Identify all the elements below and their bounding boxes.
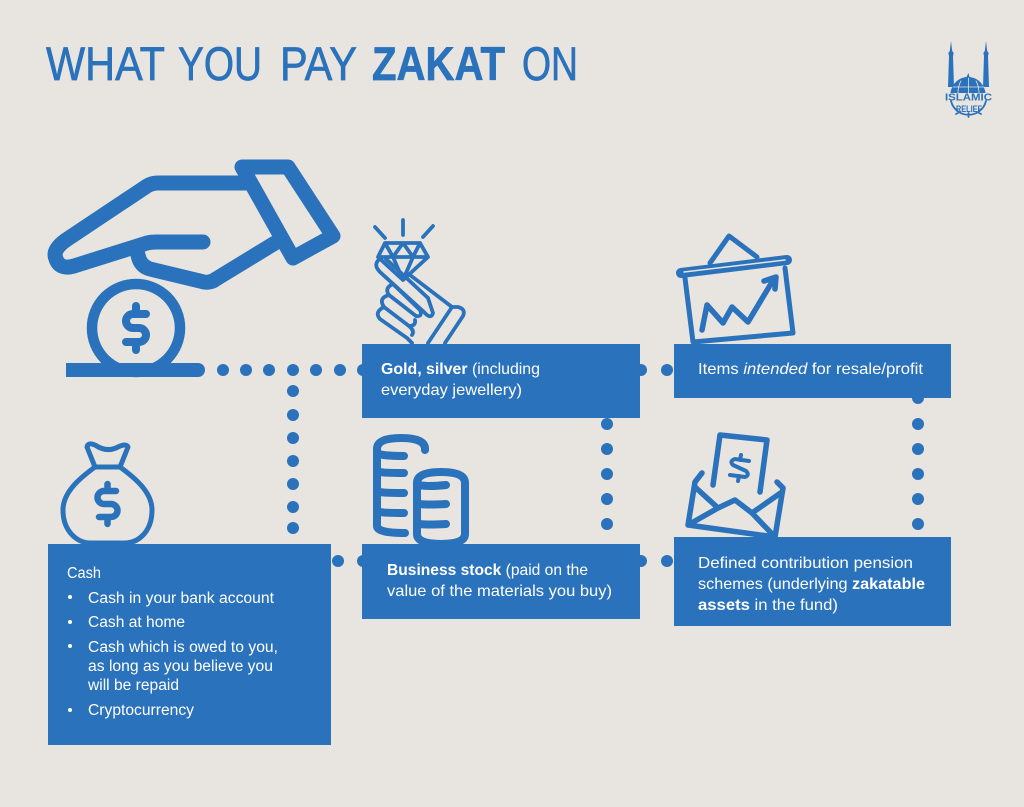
connector dots: items to pension xyxy=(912,392,924,530)
panel: defined contribution pension: assets in the fund) xyxy=(698,597,838,614)
connector dots: gold to business stock xyxy=(601,418,613,530)
board roof xyxy=(710,236,757,263)
panel: cash xyxy=(48,544,331,745)
hand outline xyxy=(55,183,275,282)
board top rail xyxy=(681,260,787,273)
panel: cash: Cash at home xyxy=(88,614,185,631)
panel: gold and silver: Gold, silver (including xyxy=(381,361,540,378)
panel: cash: as long as you believe you xyxy=(88,658,273,675)
panel: cash: Cash which is owed to you, xyxy=(88,639,278,656)
icon: diamond ring in hand xyxy=(375,220,464,343)
logo: Islamic Relief: ISLAMIC xyxy=(945,92,992,104)
cuff xyxy=(242,167,333,258)
title: PAY xyxy=(280,38,357,91)
panel: gold and silver: everyday jewellery) xyxy=(381,382,522,399)
panel: defined contribution pension: Defined contribution pension xyxy=(698,555,913,572)
title xyxy=(46,38,578,91)
connector dots: cash to business stock xyxy=(332,555,369,567)
title: WHAT xyxy=(46,38,165,91)
coin base line xyxy=(66,363,205,377)
icon: money bag xyxy=(63,444,152,543)
coin dollar sign xyxy=(126,306,146,350)
connector dots: business stock to pension xyxy=(635,555,673,567)
panel: cash: Cash xyxy=(67,565,101,582)
coin xyxy=(92,284,180,372)
panel: gold and silver xyxy=(362,344,640,418)
connector dots: gold to items xyxy=(635,364,673,376)
logo: Islamic Relief: RELIEF xyxy=(956,104,982,114)
icon: stacks of coins xyxy=(377,438,465,544)
icon: envelope with banknote xyxy=(688,435,783,537)
title: ON xyxy=(522,38,578,91)
board frame xyxy=(685,268,793,342)
panel: items for resale xyxy=(674,344,951,398)
title: YOU xyxy=(178,38,262,91)
bag dollar sign xyxy=(98,484,118,524)
panel: business stock: value of the materials you buy) xyxy=(387,583,612,600)
panel: defined contribution pension: schemes (underlying zakatable xyxy=(698,576,925,593)
panel: cash: Cryptocurrency xyxy=(88,702,194,719)
panel: business stock: Business stock (paid on the xyxy=(387,562,588,579)
panel: defined contribution pension xyxy=(674,537,951,626)
chart arrow xyxy=(702,277,776,330)
panel: cash: Cash in your bank account xyxy=(88,590,275,607)
title: ZAKAT xyxy=(372,38,505,91)
panel: cash: will be repaid xyxy=(87,677,179,694)
connector dots: top row and left column xyxy=(217,364,369,534)
panel: business stock xyxy=(362,544,640,619)
logo: Islamic Relief xyxy=(945,41,992,117)
panel: items for resale: Items intended for resale/profit xyxy=(698,361,924,378)
icon: presentation board with rising chart xyxy=(681,236,793,342)
icon: hand placing coin xyxy=(55,167,333,377)
